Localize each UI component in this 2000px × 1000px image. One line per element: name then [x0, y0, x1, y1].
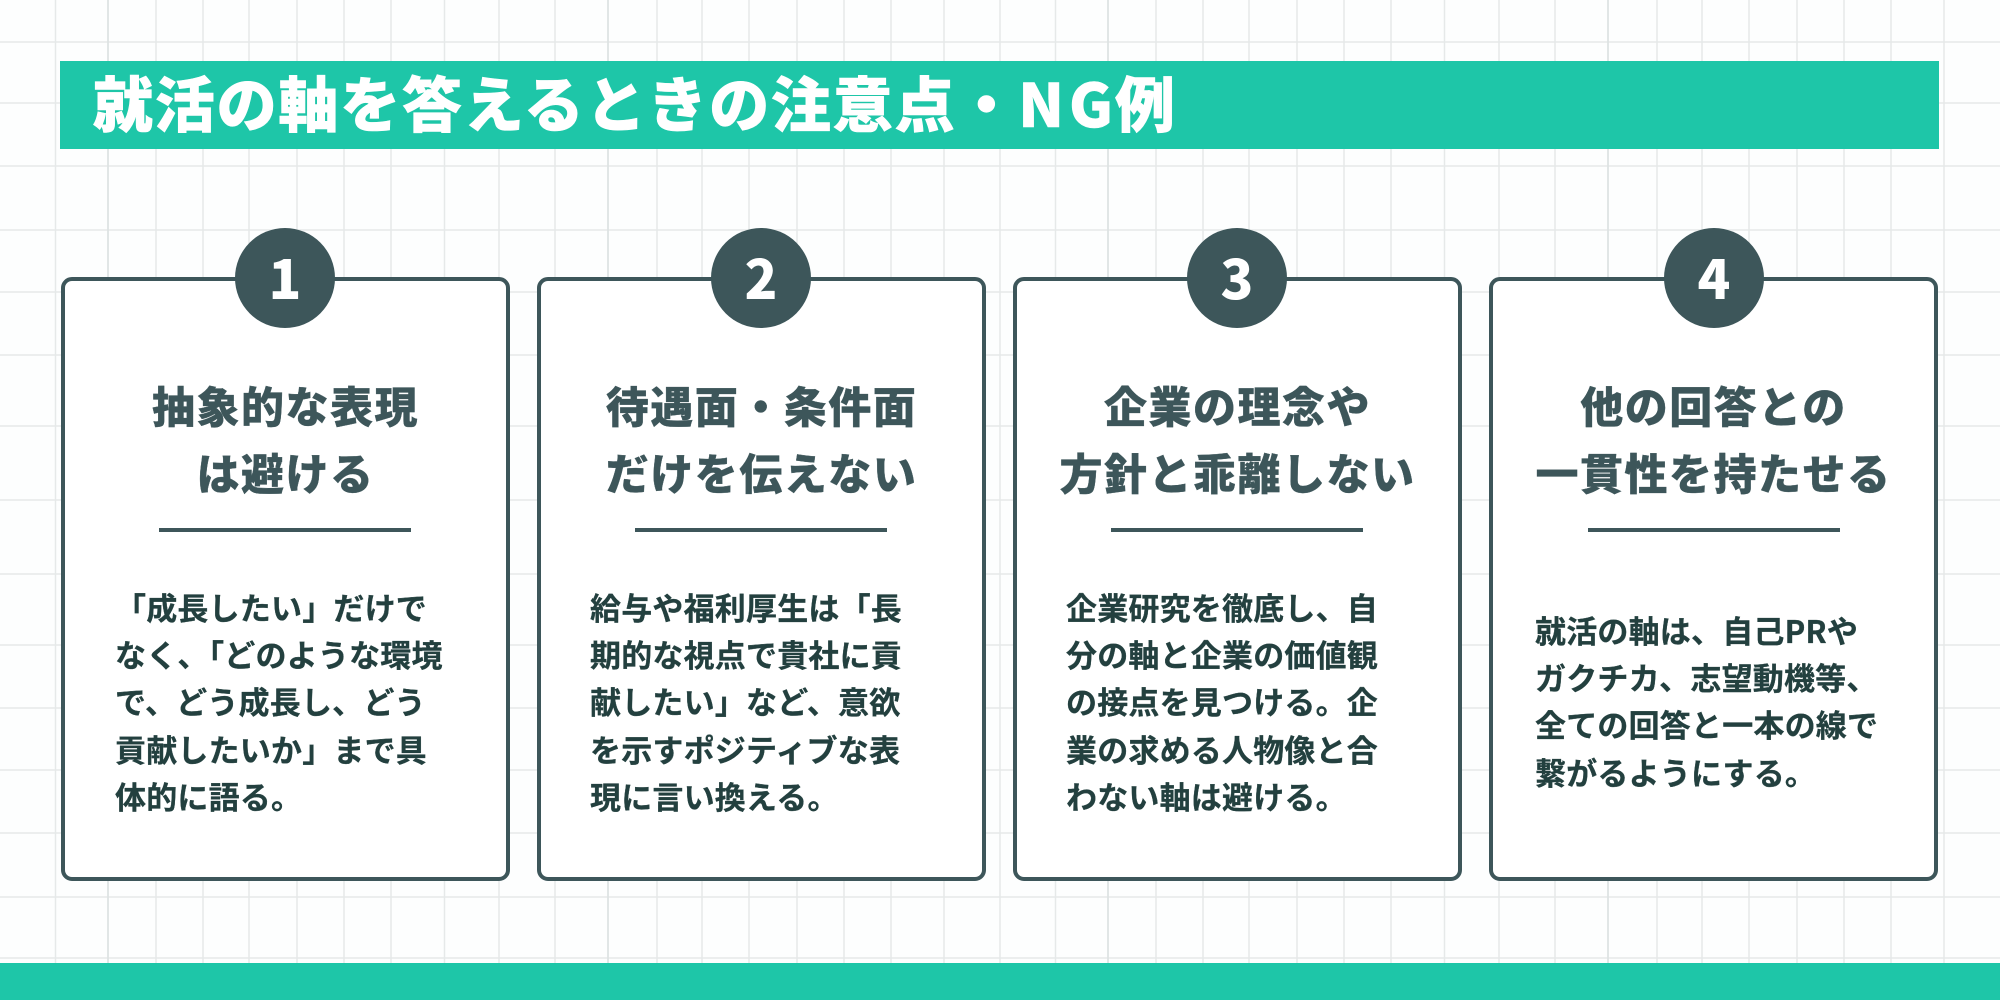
heading: card 3: 企業の理念や — [1104, 374, 1371, 436]
text block: card 2: を示すポジティブな表 — [590, 726, 900, 771]
number badge 4 — [1664, 228, 1764, 328]
panel: card 2 — [537, 277, 986, 881]
text block: card 1: 体的に語る。 — [115, 773, 302, 818]
heading: card 2: だけを伝えない — [606, 441, 917, 503]
text block: card 4: ガクチカ、志望動機等、 — [1535, 654, 1878, 699]
text block: card 1: なく、「どのような環境 — [115, 631, 443, 676]
number badge 2: 2 — [745, 236, 777, 315]
panel: card 4 — [1489, 277, 1938, 881]
divider: card 2 — [635, 528, 887, 532]
heading: card 1: は避ける — [196, 441, 374, 503]
heading: card 4 — [1536, 374, 1892, 503]
panel: card 3 — [1013, 277, 1462, 881]
text block: card 3 — [1066, 584, 1378, 818]
divider: card 4 — [1588, 528, 1840, 532]
footer band — [0, 963, 2000, 1000]
text block: card 3: の接点を見つける。企 — [1066, 678, 1378, 723]
number badge 4: 4 — [1698, 236, 1730, 315]
text block: card 1: で、どう成長し、どう — [115, 678, 426, 723]
text block: card 3: 企業研究を徹底し、自 — [1066, 584, 1378, 629]
text block: card 4: 就活の軸は、自己PRや — [1535, 607, 1858, 652]
heading: card 1: 抽象的な表現 — [152, 374, 419, 436]
heading: card 2: 待遇面・条件面 — [606, 374, 917, 436]
text block: card 1 — [115, 584, 443, 818]
heading: card 3 — [1060, 374, 1416, 503]
number badge 1: 1 — [269, 236, 301, 315]
text block: card 4 — [1535, 607, 1878, 794]
title: 就活の軸を答えるときの注意点・NG例 — [93, 58, 1177, 145]
heading: card 1 — [152, 374, 419, 503]
text block: card 3: 業の求める人物像と合 — [1066, 726, 1378, 771]
text block: card 4: 全ての回答と一本の線で — [1535, 701, 1878, 746]
heading: card 2 — [606, 374, 917, 503]
text block: card 1: 貢献したいか」まで具 — [115, 726, 427, 771]
heading: card 4: 他の回答との — [1580, 374, 1847, 436]
text block: card 2: 現に言い換える。 — [590, 773, 839, 818]
text block: card 1: 「成長したい」だけで — [115, 584, 427, 629]
number badge 3: 3 — [1221, 236, 1253, 315]
heading: card 3: 方針と乖離しない — [1060, 441, 1416, 503]
text block: card 2: 給与や福利厚生は「長 — [590, 584, 902, 629]
heading: card 4: 一貫性を持たせる — [1536, 441, 1892, 503]
text block: card 2 — [590, 584, 902, 818]
text block: card 4: 繋がるようにする。 — [1535, 749, 1816, 794]
number badge 1 — [235, 228, 335, 328]
divider: card 1 — [159, 528, 411, 532]
number badge 2 — [711, 228, 811, 328]
divider: card 3 — [1111, 528, 1363, 532]
text block: card 2: 献したい」など、意欲 — [590, 678, 900, 723]
text block: card 3: わない軸は避ける。 — [1066, 773, 1347, 818]
text block: card 2: 期的な視点で貴社に貢 — [590, 631, 902, 676]
text block: card 3: 分の軸と企業の価値観 — [1066, 631, 1378, 676]
title banner — [60, 61, 1939, 149]
panel: card 1 — [61, 277, 510, 881]
number badge 3 — [1187, 228, 1287, 328]
